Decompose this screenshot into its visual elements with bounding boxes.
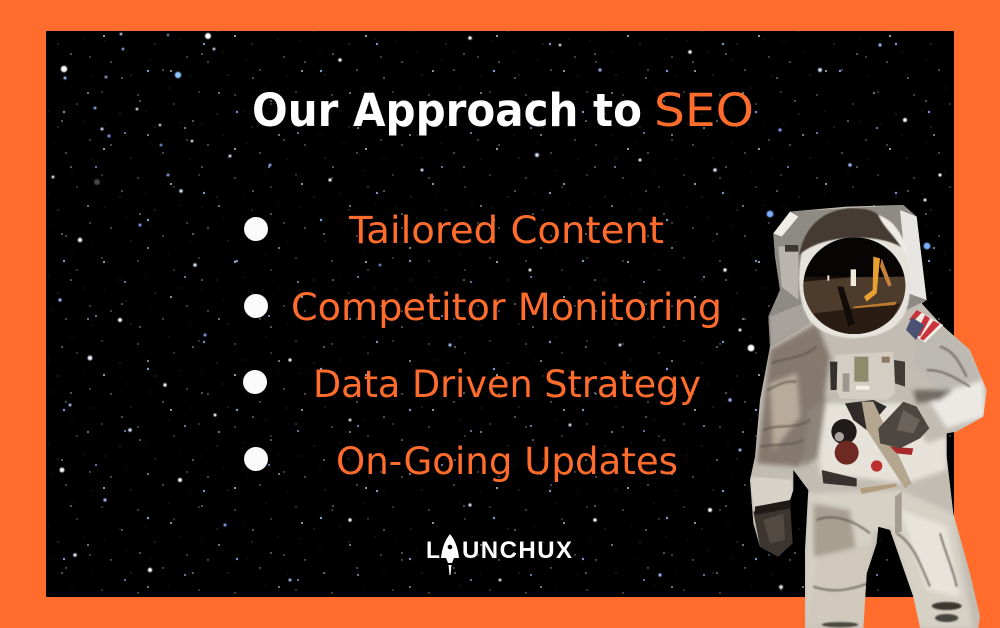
- chest control unit: [830, 352, 905, 400]
- LaunchUX logo: UNCHUX: [462, 537, 572, 564]
- list item: Tailored Content: Tailored Content: [348, 209, 664, 252]
- list item: On-Going Updates: On-Going Updates: [336, 440, 678, 483]
- LaunchUX logo: L: [426, 537, 440, 564]
- backpack: [768, 205, 927, 347]
- right glove: [878, 402, 929, 448]
- title: Our Approach to: [252, 84, 642, 137]
- left glove: [753, 500, 793, 557]
- astronaut: [750, 205, 987, 628]
- helmet shell: [799, 208, 910, 338]
- helmet visor: [803, 237, 906, 334]
- LaunchUX logo: [426, 534, 572, 575]
- title: SEO: [654, 84, 754, 137]
- chest hoses and connectors: [822, 400, 913, 533]
- US flag patch: [906, 310, 943, 343]
- suit wrinkles: [760, 347, 970, 590]
- list item: Data Driven Strategy: Data Driven Strategy: [313, 363, 701, 406]
- leg scuff marks: [750, 477, 962, 627]
- suit shading: [757, 317, 987, 628]
- list item: Competitor Monitoring: Competitor Monitoring: [291, 286, 722, 329]
